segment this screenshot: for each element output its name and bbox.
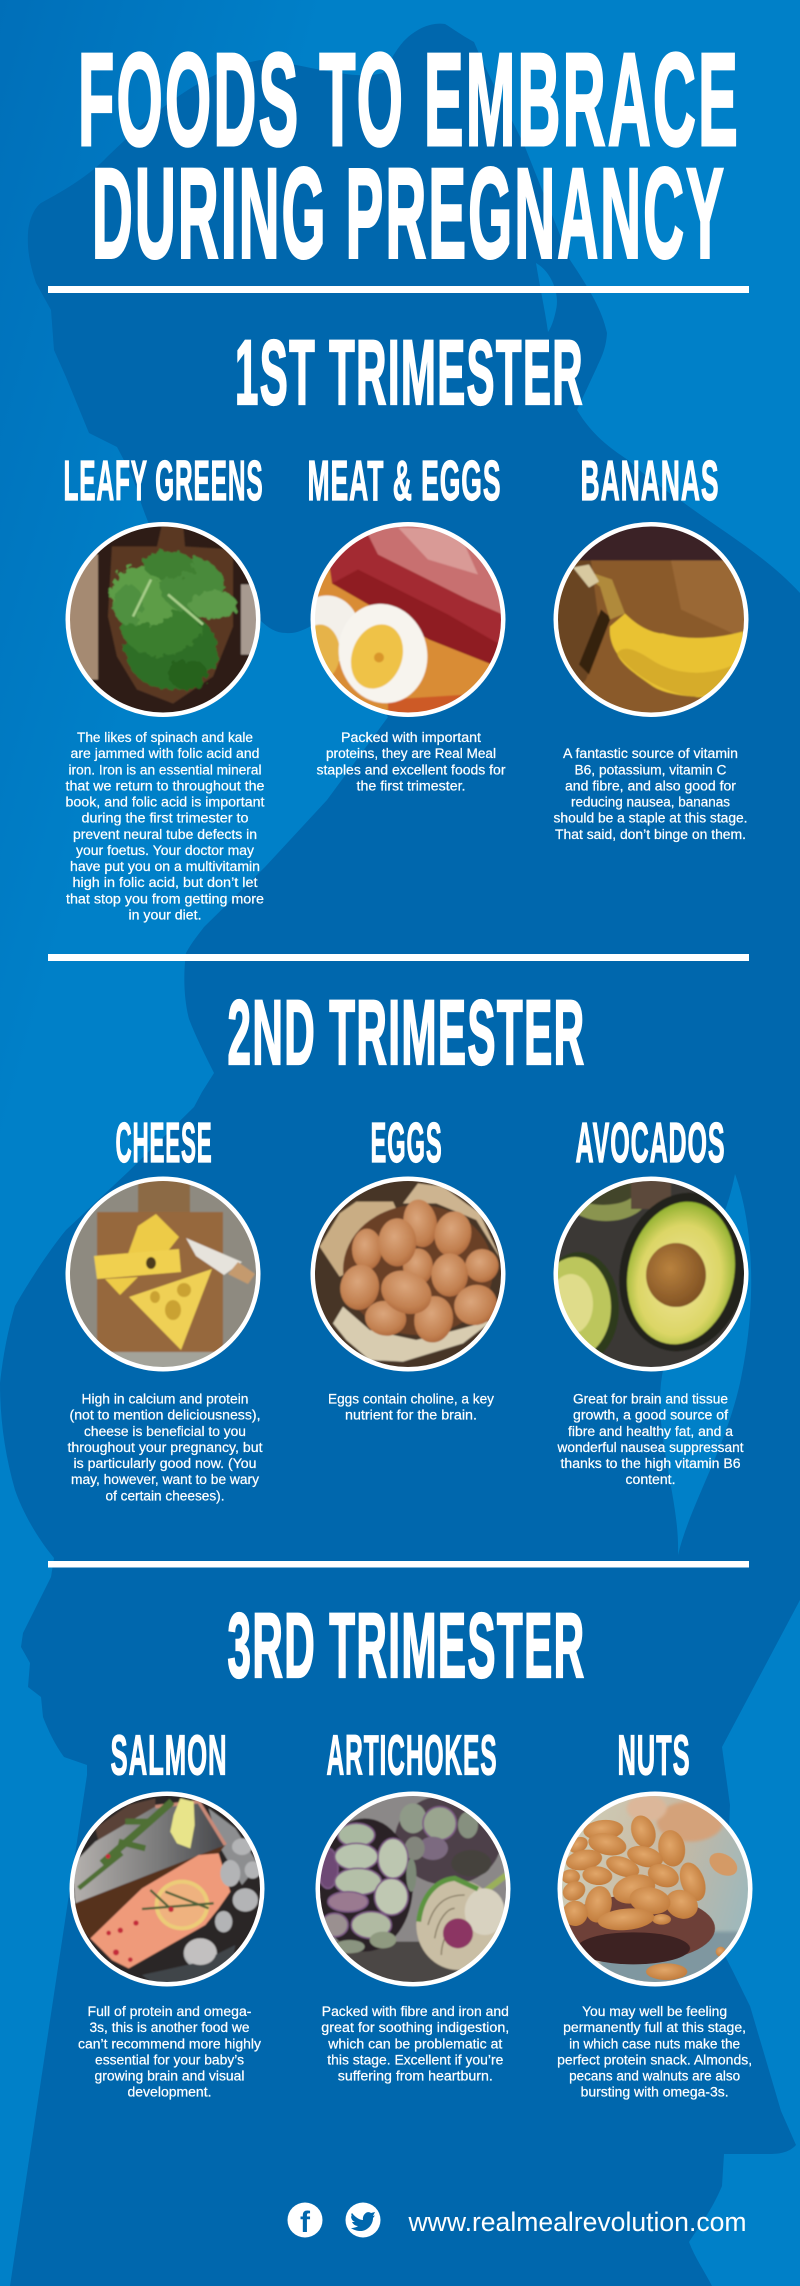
- panel: 2nd trimester: [66, 982, 761, 1503]
- description: content.: [626, 1472, 676, 1487]
- description: fibre and healthy fat, and a: [568, 1424, 734, 1439]
- panel: 1st trimester: MEAT & EGGS: [308, 449, 502, 513]
- description: Great for brain and tissue: [573, 1392, 728, 1406]
- panel: 3rd trimester: ARTICHOKES: [326, 1724, 498, 1788]
- panel: 1st trimester: LEAFY GREENS: [64, 449, 264, 513]
- food: nuts: [550, 1724, 760, 2100]
- icon: facebook: f: [300, 2206, 311, 2239]
- description: [66, 730, 265, 922]
- food: eggs: [310, 1122, 506, 1420]
- description: great for soothing indigestion,: [321, 2020, 509, 2035]
- description: can’t recommend more highly: [78, 2036, 261, 2051]
- food: leafy greens: [64, 449, 265, 922]
- photo: avocados: [554, 1176, 748, 1372]
- photo: meat and eggs: [295, 522, 506, 717]
- description: [328, 1392, 494, 1423]
- description: permanently full at this stage,: [563, 2020, 746, 2035]
- description: are jammed with folic acid and: [70, 746, 260, 761]
- food: artichokes: [308, 1724, 518, 2084]
- photo: eggs in cloth: [310, 1176, 506, 1372]
- food: nuts: NUTS: [618, 1724, 690, 1788]
- panel: 3rd trimester: [62, 1595, 760, 2100]
- description: The likes of spinach and kale: [77, 730, 253, 745]
- description: throughout your pregnancy, but: [68, 1440, 263, 1455]
- description: which can be problematic at: [327, 2036, 503, 2051]
- footer: [288, 2202, 746, 2239]
- description: that we return to throughout the: [66, 778, 264, 793]
- description: thanks to the high vitamin B6: [560, 1456, 740, 1471]
- description: is particularly good now. (You: [74, 1456, 256, 1471]
- photo: cheese on board: [66, 1176, 260, 1372]
- description: Eggs contain choline, a key: [328, 1392, 494, 1406]
- description: nutrient for the brain.: [345, 1408, 477, 1423]
- description: this stage. Excellent if you’re: [327, 2052, 503, 2067]
- description: High in calcium and protein: [82, 1392, 248, 1406]
- icon: twitter: [346, 2202, 380, 2238]
- description: B6, potassium, vitamin C: [574, 762, 727, 777]
- description: perfect protein snack. Almonds,: [557, 2052, 752, 2067]
- description: in which case nuts make the: [569, 2036, 740, 2051]
- photo: salmon: [70, 1792, 264, 1986]
- light sliver lower right: [660, 1174, 751, 1555]
- description: Full of protein and omega-: [88, 2004, 252, 2019]
- description: pecans and walnuts are also: [569, 2068, 740, 2084]
- description: in your diet.: [128, 907, 202, 922]
- description: essential for your baby’s: [95, 2052, 244, 2067]
- description: cheese is beneficial to you: [84, 1424, 246, 1439]
- divider: [48, 286, 749, 293]
- food: bananas: [554, 449, 748, 842]
- description: should be a staple at this stage.: [554, 811, 748, 826]
- food: meat and eggs: [295, 449, 506, 793]
- food: avocados: [554, 1122, 748, 1484]
- description: bursting with omega-3s.: [581, 2085, 729, 2100]
- photo: banana: [554, 522, 748, 717]
- divider: [48, 1561, 749, 1568]
- divider: [48, 954, 749, 961]
- description: [321, 2004, 509, 2084]
- description: That said, don’t binge on them.: [555, 827, 746, 842]
- description: [78, 2004, 261, 2100]
- description: wonderful nausea suppressant: [556, 1440, 744, 1455]
- description: high in folic acid, but don’t let: [72, 875, 258, 890]
- photo: kale on shovel: [66, 522, 260, 717]
- icon: facebook: [288, 2202, 322, 2239]
- description: iron. Iron is an essential mineral: [68, 762, 262, 777]
- description: that stop you from getting more: [66, 891, 264, 906]
- description: [556, 1392, 744, 1487]
- description: suffering from heartburn.: [338, 2068, 493, 2084]
- photo: artichokes: [316, 1792, 510, 1986]
- food: salmon: [62, 1724, 272, 2100]
- description: You may well be feeling: [582, 2004, 727, 2019]
- light sliver upper right: [536, 263, 557, 332]
- food: eggs: EGGS: [370, 1111, 442, 1175]
- description: your foetus. Your doctor may: [76, 843, 254, 858]
- description: [557, 2004, 752, 2100]
- description: growth, a good source of: [573, 1408, 728, 1423]
- description: book, and folic acid is important: [66, 794, 265, 810]
- description: proteins, they are Real Meal: [326, 746, 496, 761]
- photo: almonds in bowl: [558, 1792, 752, 1986]
- description: and fibre, and also good for: [565, 778, 737, 793]
- description: development.: [128, 2085, 212, 2100]
- description: during the first trimester to: [82, 811, 248, 826]
- description: (not to mention deliciousness),: [70, 1408, 260, 1423]
- description: growing brain and visual: [94, 2068, 245, 2084]
- food: salmon: SALMON: [110, 1724, 228, 1788]
- description: staples and excellent foods for: [316, 762, 506, 777]
- description: of certain cheeses).: [106, 1488, 224, 1503]
- website url: www.realmealrevolution.com: [408, 2207, 746, 2237]
- description: A fantastic source of vitamin: [563, 746, 738, 761]
- description: Packed with fibre and iron and: [322, 2004, 509, 2019]
- food: cheese: [66, 1111, 263, 1503]
- description: reducing nausea, bananas: [571, 794, 730, 810]
- panel: 1st trimester: [64, 322, 748, 922]
- description: [316, 730, 506, 793]
- food: cheese: CHEESE: [116, 1111, 212, 1175]
- description: [554, 746, 748, 842]
- description: have put you on a multivitamin: [70, 859, 260, 874]
- description: [68, 1392, 263, 1503]
- title: [78, 26, 740, 286]
- description: 3s, this is another food we: [90, 2020, 250, 2035]
- description: Packed with important: [341, 730, 481, 745]
- description: the first trimester.: [356, 778, 466, 793]
- description: may, however, want to be wary: [71, 1472, 259, 1487]
- description: prevent neural tube defects in: [73, 827, 257, 842]
